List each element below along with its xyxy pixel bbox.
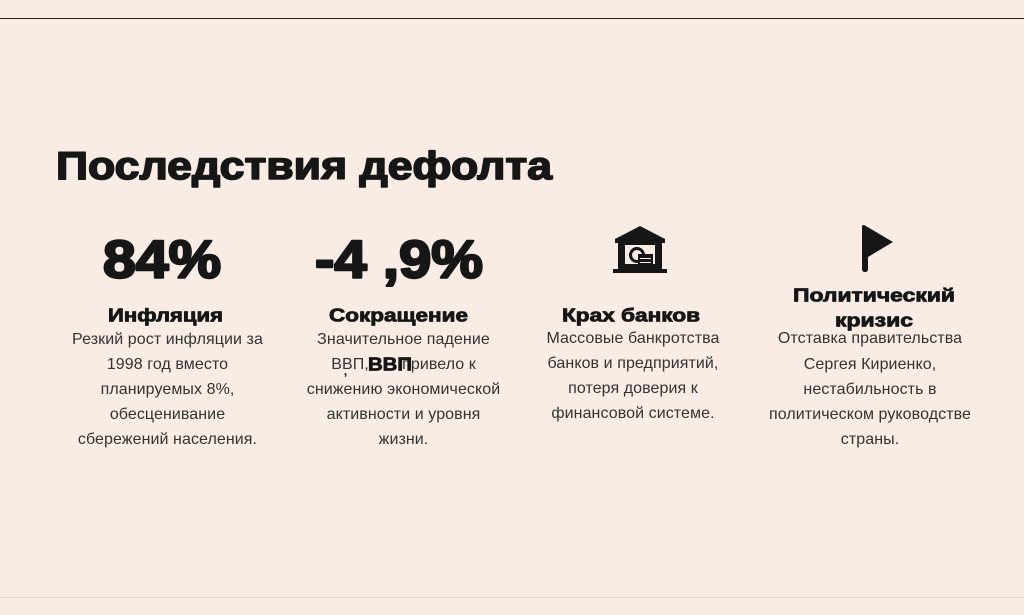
text: political description: страны. xyxy=(841,431,899,448)
heading: political crisis: Политический xyxy=(793,284,955,306)
panel: inflation xyxy=(72,230,263,448)
overlapping comma: , xyxy=(344,366,347,378)
text: reduction description: жизни. xyxy=(379,431,428,448)
text: bank description: потеря доверия к xyxy=(568,380,699,397)
heading: political crisis xyxy=(793,284,955,330)
text: reduction description: привело к xyxy=(402,356,477,373)
icon: bank xyxy=(613,226,667,273)
text: bank description: банков и предприятий, xyxy=(548,355,718,372)
heading: political crisis: кризис xyxy=(835,310,913,330)
text: political description: Сергея Кириенко, xyxy=(804,356,936,373)
heading: reduction: Сокращение xyxy=(329,304,468,326)
text: inflation description: Резкий рост инфляции за xyxy=(72,331,263,348)
panel: GDP reduction xyxy=(307,230,500,448)
icon: flag xyxy=(862,225,893,272)
heading: bank collapse: Крах банков xyxy=(562,304,700,326)
text: reduction description: снижению экономической xyxy=(307,381,500,398)
text: inflation description: 1998 год вместо xyxy=(107,356,228,373)
heading: inflation: Инфляция xyxy=(108,304,223,326)
text: bank description: финансовой системе. xyxy=(551,405,715,422)
text: political description: нестабильность в xyxy=(803,381,937,398)
text: political description: политическом руководстве xyxy=(769,406,971,423)
title: Последствия дефолта xyxy=(56,145,552,188)
stat: 84%: 84% xyxy=(103,230,221,290)
stat: -4,9%: -4 ,9% xyxy=(315,230,483,290)
text: reduction description: ВВП, xyxy=(331,356,369,373)
text: inflation description: обесценивание xyxy=(110,406,225,423)
panel: political crisis xyxy=(769,225,971,448)
overlapping label: GDP: ВВП xyxy=(368,354,412,374)
text: inflation description: планируемых 8%, xyxy=(101,381,234,398)
text: bank description xyxy=(546,330,720,422)
panel: bank collapse xyxy=(546,226,720,422)
text: bank description: Массовые банкротства xyxy=(546,330,720,347)
text: reduction description: активности и уровня xyxy=(327,406,480,423)
text: reduction description xyxy=(307,331,500,448)
text: inflation description: сбережений населения. xyxy=(78,431,257,448)
text: reduction description: Значительное падение xyxy=(317,331,490,348)
text: inflation description xyxy=(72,331,263,448)
text: political description: Отставка правительства xyxy=(778,330,962,347)
text: political description xyxy=(769,330,971,448)
